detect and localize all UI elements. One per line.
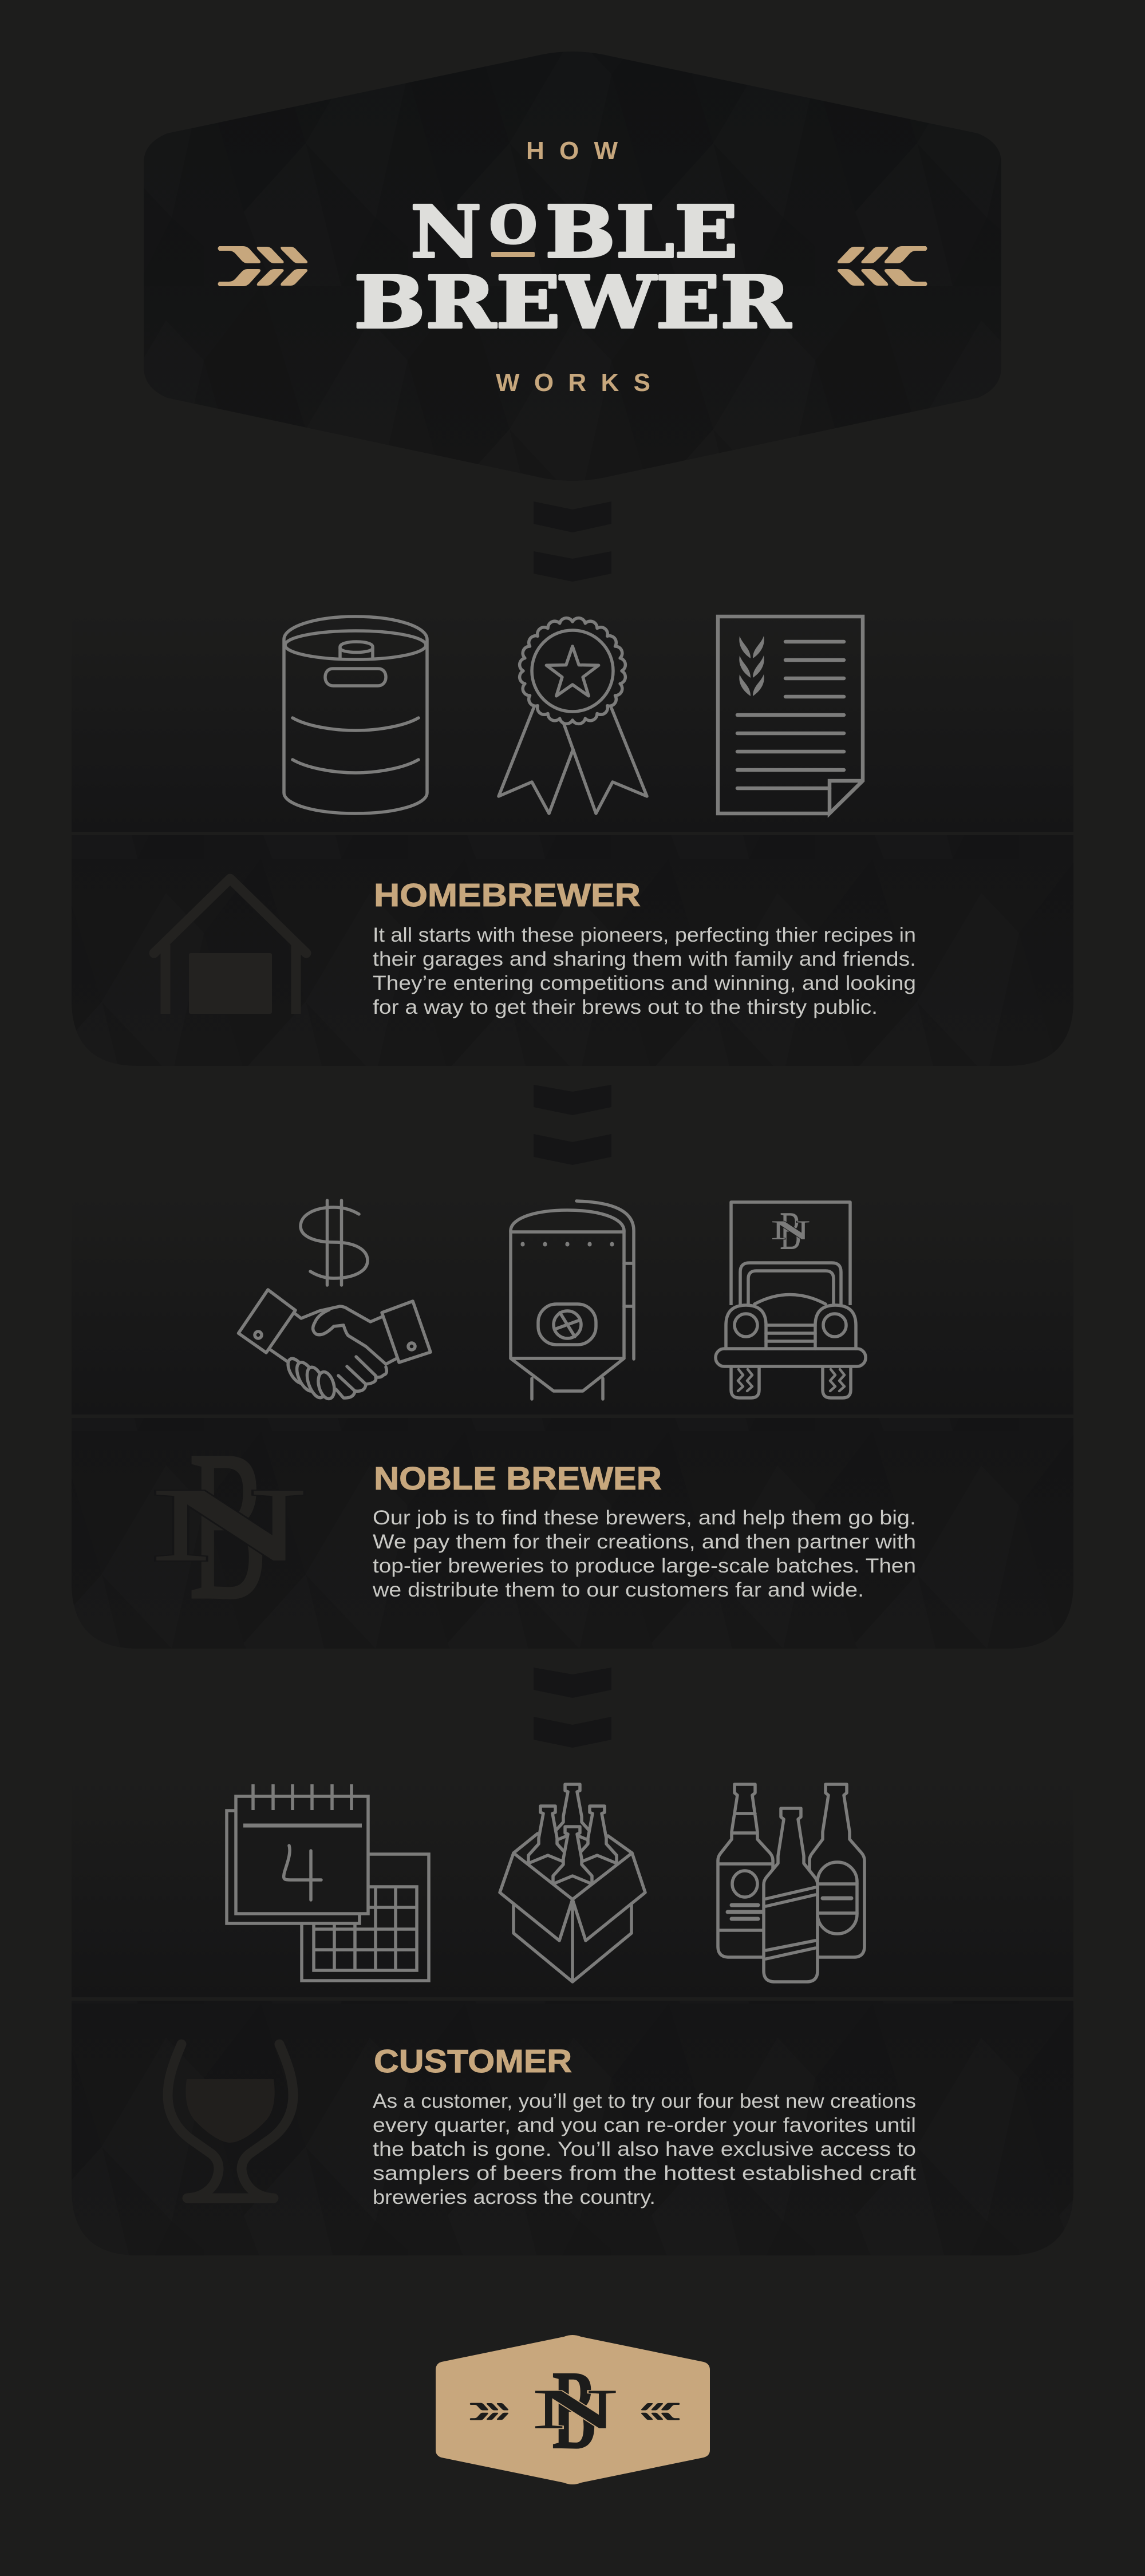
text block: homebrewer: It all starts with these pioneers, perfecting thier recipes in: [373, 924, 916, 946]
icon: calendars: [227, 1784, 429, 1981]
icon: box of bottles: [500, 1784, 645, 1982]
bottle right: [810, 1784, 864, 1957]
title: noble brewer: BREWER: [354, 261, 791, 345]
footer logo monogram: [533, 2347, 617, 2474]
footer logo monogram: N: [533, 2377, 617, 2441]
icon: delivery truck: [716, 1200, 866, 1398]
bottle left: [718, 1784, 773, 1957]
icon: beer glass watermark: [168, 2044, 293, 2198]
heading: noble brewer: NOBLE BREWER: [374, 1460, 662, 1497]
title: noble brewer: [354, 191, 791, 345]
panel: homebrewer: [72, 611, 1073, 1066]
text block: noble brewer: we distribute them to our customers far and wide.: [372, 1579, 864, 1601]
arrow: chevrons to customer: [534, 1668, 611, 1748]
icon: dollar sign: [301, 1200, 368, 1285]
text block: homebrewer: their garages and sharing them with family and friends.: [373, 948, 916, 970]
heading: how: HOW: [526, 137, 618, 165]
text block: customer: As a customer, you’ll get to try our four best new creations: [373, 2090, 916, 2112]
text block: customer: the batch is gone. You’ll also have exclusive access to: [373, 2138, 916, 2160]
icon: three bottles: [718, 1784, 864, 1982]
arrow: chevrons to noble brewer: [534, 1085, 611, 1165]
icon: garage watermark: [154, 879, 306, 1014]
text block: homebrewer: [373, 924, 916, 1018]
text block: customer: [373, 2090, 916, 2208]
panel: customer: [72, 1777, 1073, 2255]
footer logo monogram: B: [552, 2347, 596, 2474]
icon: wheat left: [218, 246, 307, 286]
title: noble brewer: BLE: [545, 191, 738, 274]
text block: noble brewer: Our job is to find these brewers, and help them go big.: [373, 1507, 916, 1529]
text block: noble brewer: [372, 1507, 916, 1601]
truck logo: [771, 1200, 810, 1261]
icon: fermenter tank: [511, 1201, 634, 1399]
text block: noble brewer: top-tier breweries to produce large-scale batches. Then: [373, 1555, 916, 1577]
heading: homebrewer: HOMEBREWER: [374, 877, 641, 914]
text block: customer: samplers of beers from the hottest established craft: [373, 2162, 916, 2184]
text block: customer: breweries across the country.: [373, 2186, 656, 2208]
arrow: chevrons to homebrewer: [534, 501, 611, 582]
text block: homebrewer: for a way to get their brews out to the thirsty public.: [373, 996, 878, 1018]
text block: customer: every quarter, and you can re-order your favorites until: [373, 2114, 916, 2136]
icon: recipe document: [718, 617, 863, 813]
title: noble brewer: N: [410, 191, 481, 274]
text block: homebrewer: They’re entering competitions and winning, and looking: [373, 972, 916, 994]
icon: keg: [284, 617, 427, 813]
heading: works: WORKS: [496, 369, 650, 397]
icon: monogram watermark: [152, 1408, 306, 1644]
icon: footer wheat right: [641, 2403, 680, 2420]
icon: monogram watermark: B: [189, 1408, 267, 1644]
footer badge: [436, 2335, 710, 2484]
bottle middle: [764, 1808, 818, 1982]
heading: customer: CUSTOMER: [374, 2043, 572, 2080]
icon: footer wheat left: [470, 2403, 508, 2420]
icon: handshake: [238, 1290, 431, 1401]
icon: monogram watermark: N: [152, 1465, 306, 1583]
truck logo: N: [771, 1215, 810, 1246]
truck logo: B: [780, 1200, 802, 1261]
header badge: [144, 52, 1001, 481]
title: noble brewer: O: [489, 195, 537, 255]
text block: noble brewer: We pay them for their creations, and then partner with: [373, 1531, 916, 1553]
icon: award ribbon: [499, 618, 647, 813]
icon: wheat right: [838, 246, 927, 286]
panel: noble brewer: [72, 1195, 1073, 1649]
